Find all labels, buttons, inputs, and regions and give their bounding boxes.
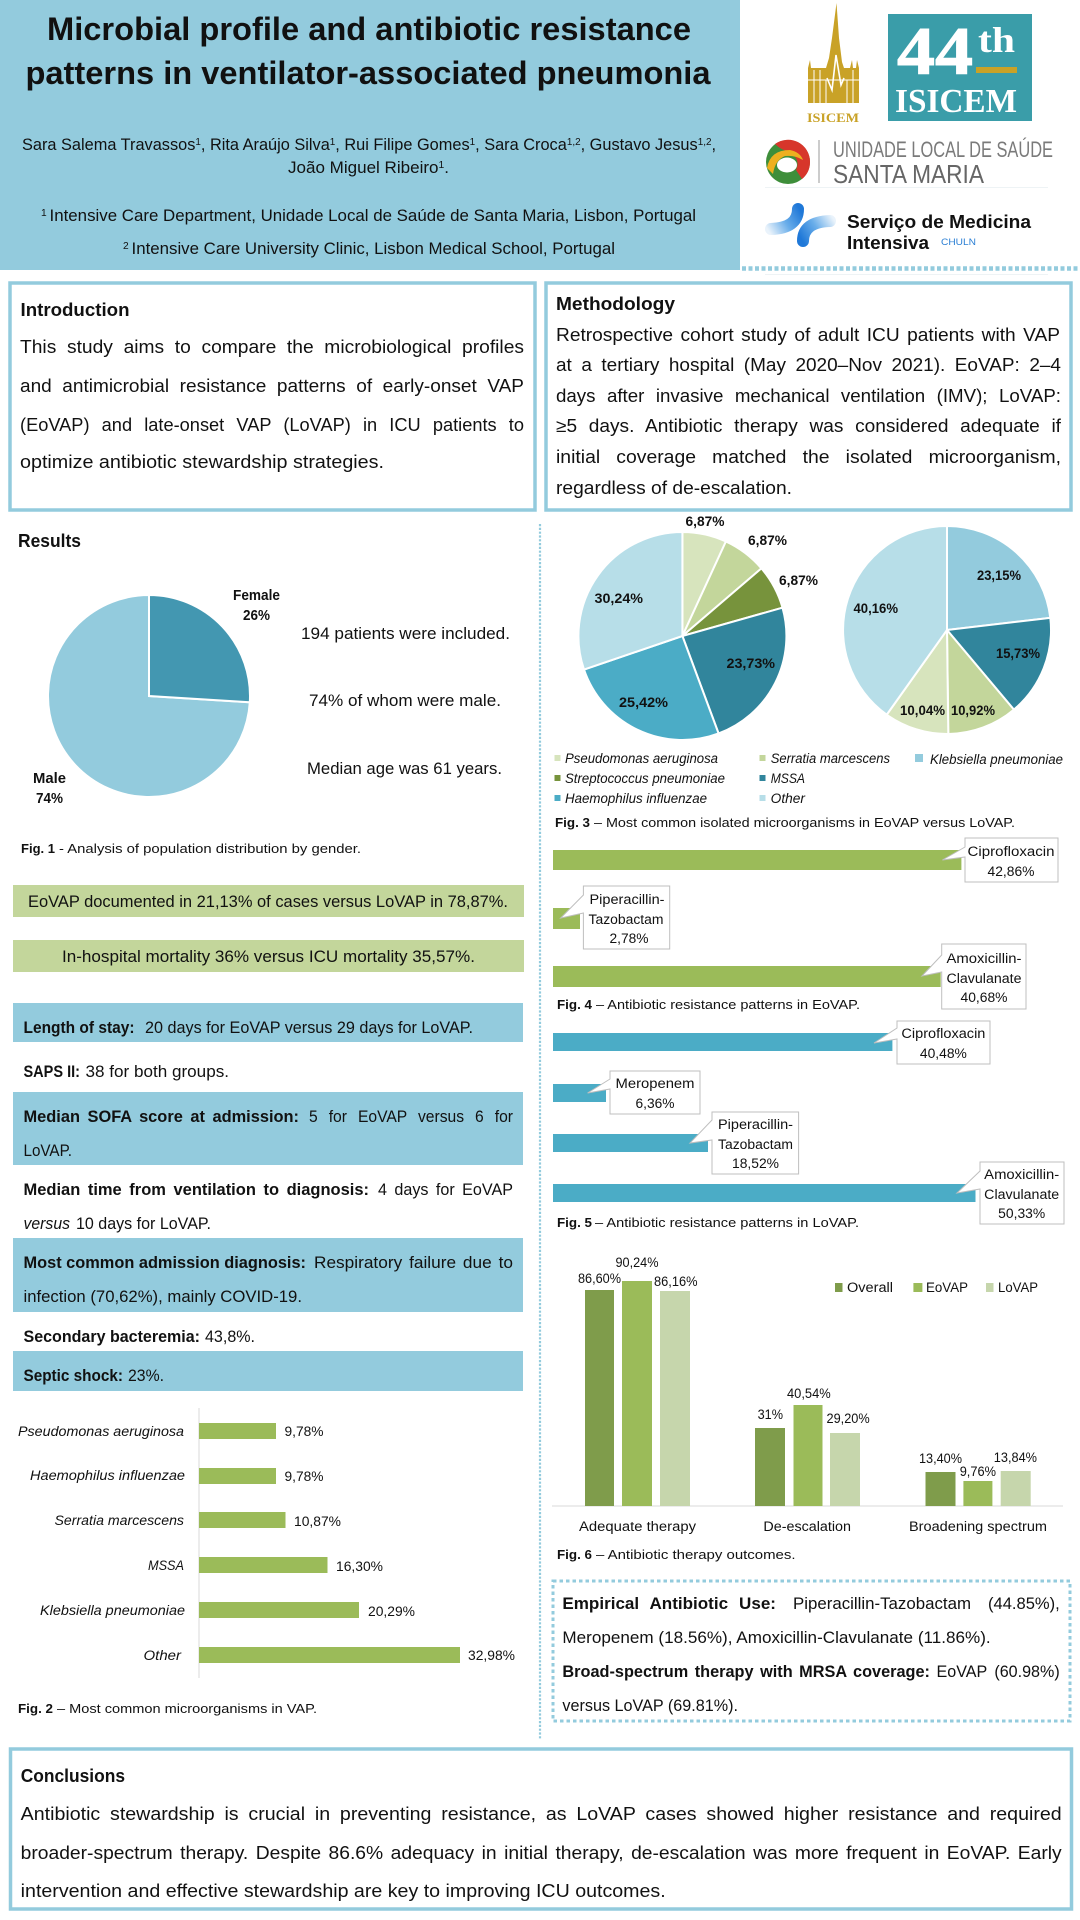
logo: ISICEM tower: [807, 3, 859, 125]
text: introduction body: optimize antibiotic stewardship strategies.: [20, 452, 384, 472]
logo: 44th ISICEM: ISICEM: [895, 83, 1017, 120]
result: SAPS II: [24, 1063, 229, 1081]
affiliations: Intensive Care Department, Unidade Local de Saúde de Santa Maria, Lisbon, Portugal: [50, 207, 696, 225]
callout: ciprofloxacin 40,48%: Ciprofloxacin: [901, 1026, 985, 1041]
caption: figure 1: Fig. 1: [21, 841, 55, 856]
text: methodology body: days after invasive mechanical ventilation (IMV); LoVAP:: [556, 386, 1061, 406]
callout: amoxicillin-clavulanate 40,68%: Clavulanate: [946, 971, 1022, 986]
bar chart: microorganisms in VAP: 20,29%: [368, 1604, 415, 1619]
result: SAPS II: SAPS II:: [24, 1063, 80, 1081]
text: conclusions body: broader-spectrum therapy. Despite 86.6% adequacy in initial therapy, de-escalation was more frequent in EoVAP. Early: [21, 1843, 1062, 1863]
panel: empirical antibiotic use: (44.85%),: [988, 1595, 1060, 1613]
title: patterns in ventilator-associated pneumonia: [26, 55, 711, 91]
pie chart: gender distribution: [33, 588, 280, 807]
callout: EoVAP vs LoVAP share: EoVAP documented in 21,13% of cases versus LoVAP in 78,87%.: [28, 892, 508, 911]
pie chart: EoVAP microorganisms: 30,24%: [594, 591, 643, 606]
legend: microorganisms: Other: [771, 791, 806, 806]
bar chart: resistance in LoVAP: [553, 1021, 1064, 1224]
text: conclusions body: [21, 1804, 1062, 1901]
affiliations: Intensive Care University Clinic, Lisbon Medical School, Portugal: [132, 240, 615, 258]
logo: Unidade Local de Saude Santa Maria: [765, 137, 1053, 189]
affiliations: 1: [41, 208, 50, 219]
caption: figure 2: – Most common microorganisms in VAP.: [57, 1701, 317, 1716]
authors: 1,2: [698, 137, 712, 148]
text: introduction body: (EoVAP) and late-onset VAP (LoVAP) in ICU patients to: [20, 415, 524, 435]
pie chart: LoVAP microorganisms: 23,15%: [977, 568, 1021, 583]
result: secondary bacteremia: 43,8%.: [205, 1328, 255, 1346]
result: admission diagnosis: Respiratory failure due to: [314, 1254, 513, 1272]
caption: figure 2: Fig. 2: [18, 1701, 53, 1716]
panel: empirical antibiotic use: Empirical Antibiotic Use:: [562, 1595, 776, 1613]
text: methodology body: regardless of de-escalation.: [556, 478, 792, 498]
callout: ciprofloxacin 42,86%: Ciprofloxacin: [968, 844, 1054, 859]
result: length of stay: Length of stay:: [24, 1019, 134, 1037]
bars: adequate therapy: 86,16%: [654, 1274, 698, 1289]
bar chart: microorganisms in VAP: Klebsiella pneumoniae: [40, 1603, 185, 1618]
authors: , Rita Araújo Silva: [201, 136, 331, 154]
heading: introduction: Introduction: [20, 300, 130, 320]
pie chart: EoVAP microorganisms: [578, 514, 818, 740]
bar chart: antibiotic therapy outcomes: [552, 1255, 1063, 1534]
pie chart: LoVAP microorganisms: 10,92%: [951, 703, 995, 718]
logo: Unidade Local de Saude Santa Maria: SANTA MARIA: [833, 159, 985, 189]
bar chart: microorganisms in VAP: Pseudomonas aeruginosa: [18, 1424, 185, 1439]
panel: conclusions: [10, 1749, 1072, 1909]
bars: adequate therapy: 86,60%: [578, 1271, 621, 1286]
logo: Servico de Medicina Intensiva: CHULN: [941, 237, 976, 248]
authors: , Gustavo Jesus: [581, 136, 698, 154]
result: median time to diagnosis: [24, 1181, 513, 1233]
caption: figure 3: Fig. 3: [555, 815, 590, 830]
bar chart: microorganisms in VAP: Other: [144, 1648, 182, 1663]
result: admission diagnosis: [13, 1238, 523, 1312]
legend: therapy outcomes: Overall: [847, 1280, 893, 1295]
caption: figure 5: – Antibiotic resistance patterns in LoVAP.: [595, 1215, 859, 1230]
affiliations: 2: [123, 241, 132, 252]
callout: mortality: In-hospital mortality 36% versus ICU mortality 35,57%.: [62, 947, 475, 966]
authors: Sara Salema Travassos: [22, 136, 197, 154]
panel: empirical antibiotic use: [553, 1581, 1070, 1721]
callout: piperacillin-tazobactam 18,52%: [690, 1112, 799, 1174]
legend: microorganisms: MSSA: [771, 771, 805, 786]
title: [26, 11, 711, 91]
result: median time to diagnosis: Median time from ventilation to diagnosis:: [24, 1181, 369, 1199]
caption: figure 4: Fig. 4: [557, 997, 593, 1012]
legend: therapy outcomes: EoVAP: [926, 1280, 968, 1295]
legend: microorganisms: Streptococcus pneumoniae: [565, 771, 725, 786]
bar chart: microorganisms in VAP: Serratia marcescens: [54, 1513, 184, 1528]
text: introduction body: and antimicrobial resistance patterns of early-onset VAP: [20, 376, 524, 396]
bars: de-escalation: 40,54%: [787, 1386, 831, 1401]
text: methodology body: [556, 325, 1062, 498]
result: median time to diagnosis: versus: [24, 1215, 70, 1233]
callout: piperacillin-tazobactam 18,52%: Tazobactam: [718, 1137, 793, 1152]
text: patient summary: Median age was 61 years.: [307, 760, 502, 778]
result: SAPS II: 38 for both groups.: [86, 1063, 229, 1081]
authors: 1,2: [567, 137, 581, 148]
legend: therapy outcomes: [835, 1280, 1038, 1295]
bars: adequate therapy: 90,24%: [616, 1255, 658, 1270]
callout: meropenem 6,36%: 6,36%: [636, 1096, 674, 1111]
text: patient summary: 194 patients were included.: [301, 625, 510, 643]
legend: microorganisms: Serratia marcescens: [771, 751, 890, 766]
bars: adequate therapy: [578, 1255, 698, 1534]
authors: 1: [330, 137, 336, 148]
pie chart: gender distribution: 74%: [36, 791, 63, 807]
logo: Servico de Medicina Intensiva: Serviço de Medicina: [847, 212, 1032, 232]
pie chart: LoVAP microorganisms: 15,73%: [996, 646, 1040, 661]
panel: empirical antibiotic use: Broad-spectrum therapy with MRSA coverage:: [562, 1663, 930, 1681]
text: methodology body: Retrospective cohort study of adult ICU patients with VAP: [556, 325, 1060, 345]
bars: adequate therapy: Adequate therapy: [579, 1519, 696, 1534]
heading: conclusions: Conclusions: [21, 1766, 125, 1786]
logo: 44th ISICEM: 44: [897, 13, 973, 89]
bars: de-escalation: De-escalation: [763, 1519, 851, 1534]
logo: ISICEM tower: ISICEM: [807, 111, 859, 125]
legend: microorganisms: Pseudomonas aeruginosa: [565, 751, 718, 766]
result: secondary bacteremia: Secondary bacteremia:: [24, 1328, 200, 1346]
bars: broadening spectrum: 13,40%: [919, 1451, 962, 1466]
text: introduction body: [20, 337, 524, 472]
legend: microorganisms: Klebsiella pneumoniae: [930, 752, 1063, 767]
result: median time to diagnosis: 4 days for EoVAP: [378, 1181, 513, 1199]
logo: 44th ISICEM: [888, 13, 1032, 121]
callout: ciprofloxacin 40,48%: 40,48%: [920, 1046, 967, 1061]
panel: empirical antibiotic use: Meropenem (18.56%), Amoxicillin-Clavulanate (11.86%).: [562, 1629, 991, 1647]
legend: microorganisms: [554, 751, 1063, 806]
callout: amoxicillin-clavulanate 40,68%: [922, 944, 1026, 1009]
pie chart: LoVAP microorganisms: [843, 526, 1051, 734]
result: length of stay: [13, 1003, 523, 1042]
callout: ciprofloxacin 40,48%: [874, 1021, 990, 1064]
callout: amoxicillin-clavulanate 40,68%: Amoxicillin-: [946, 951, 1022, 966]
legend: microorganisms: Haemophilus influenzae: [565, 791, 707, 806]
pie chart: EoVAP microorganisms: 6,87%: [779, 573, 818, 588]
logo: Servico de Medicina Intensiva: [771, 209, 1032, 253]
panel: introduction: [10, 283, 535, 510]
callout: piperacillin-tazobactam 2,78%: Piperacillin-: [590, 892, 664, 907]
bars: broadening spectrum: [909, 1450, 1047, 1534]
bars: broadening spectrum: 9,76%: [960, 1464, 996, 1479]
authors: 1: [439, 160, 445, 171]
title: Microbial profile and antibiotic resistance: [47, 11, 691, 47]
callout: amoxicillin-clavulanate 50,33%: 50,33%: [998, 1206, 1045, 1221]
result: length of stay: 20 days for EoVAP versus 29 days for LoVAP.: [145, 1019, 473, 1037]
callout: amoxicillin-clavulanate 40,68%: 40,68%: [960, 990, 1008, 1005]
bars: broadening spectrum: Broadening spectrum: [909, 1519, 1047, 1534]
callout: piperacillin-tazobactam 2,78%: Tazobactam: [588, 912, 664, 927]
callout: ciprofloxacin 42,86%: 42,86%: [988, 864, 1034, 879]
panel: empirical antibiotic use: Piperacillin-Tazobactam: [793, 1595, 971, 1613]
caption: figure 6: Fig. 6: [557, 1547, 592, 1562]
callout: piperacillin-tazobactam 2,78%: [561, 886, 670, 949]
pie chart: gender distribution: Male: [33, 771, 66, 787]
logo: 44th ISICEM: th: [978, 20, 1015, 60]
pie chart: LoVAP microorganisms: 10,04%: [900, 703, 945, 718]
result: median SOFA score: Median SOFA score at admission:: [24, 1108, 299, 1126]
heading: methodology: Methodology: [556, 294, 675, 314]
result: admission diagnosis: infection (70,62%), mainly COVID-19.: [24, 1288, 302, 1306]
callout: amoxicillin-clavulanate 50,33%: Clavulanate: [984, 1187, 1059, 1202]
pie chart: LoVAP microorganisms: 40,16%: [854, 601, 898, 616]
result: septic shock: [13, 1351, 523, 1391]
affiliations: [41, 207, 696, 258]
authors: 1: [470, 137, 476, 148]
bar chart: resistance in EoVAP: [553, 838, 1058, 1009]
caption: figure 1: - Analysis of population distribution by gender.: [59, 841, 361, 856]
bar chart: microorganisms in VAP: 32,98%: [468, 1648, 515, 1663]
result: septic shock: 23%.: [128, 1367, 164, 1385]
result: median time to diagnosis: 10 days for LoVAP.: [76, 1215, 211, 1233]
callout: piperacillin-tazobactam 2,78%: 2,78%: [610, 931, 648, 946]
callout: EoVAP vs LoVAP share: [13, 885, 524, 917]
caption: figure 6: – Antibiotic therapy outcomes.: [596, 1547, 796, 1562]
result: median SOFA score: LoVAP.: [24, 1142, 72, 1160]
result: median SOFA score: 5 for EoVAP versus 6 for: [309, 1108, 513, 1126]
caption: figure 3: – Most common isolated microorganisms in EoVAP versus LoVAP.: [594, 815, 1015, 830]
bars: de-escalation: 31%: [758, 1407, 783, 1422]
pie chart: EoVAP microorganisms: 6,87%: [686, 514, 724, 529]
bars: de-escalation: 29,20%: [826, 1411, 870, 1426]
panel: methodology: [546, 283, 1071, 510]
callout: piperacillin-tazobactam 18,52%: Piperacillin-: [718, 1117, 793, 1132]
bar chart: microorganisms in VAP: [18, 1408, 515, 1678]
bars: broadening spectrum: 13,84%: [994, 1450, 1037, 1465]
pie chart: EoVAP microorganisms: 25,42%: [619, 695, 668, 710]
text: introduction body: This study aims to compare the microbiological profiles: [20, 337, 524, 357]
bar chart: microorganisms in VAP: Haemophilus influenzae: [30, 1468, 185, 1483]
bars: de-escalation: [755, 1386, 870, 1534]
caption: figure 5: Fig. 5: [557, 1215, 592, 1230]
heading: results: Results: [18, 531, 81, 551]
bar chart: microorganisms in VAP: 9,78%: [284, 1469, 324, 1484]
callout: amoxicillin-clavulanate 50,33%: Amoxicillin-: [984, 1167, 1059, 1182]
text: conclusions body: Antibiotic stewardship is crucial in preventing resistance, as LoVAP cases showed higher resistance and required: [21, 1804, 1062, 1824]
authors: .: [444, 159, 449, 177]
authors: João Miguel Ribeiro: [288, 159, 434, 177]
bar chart: microorganisms in VAP: 9,78%: [284, 1424, 324, 1439]
text: conclusions body: intervention and effective stewardship are key to improving ICU outcomes.: [21, 1881, 666, 1901]
pie chart: gender distribution: Female: [233, 588, 280, 604]
callout: ciprofloxacin 42,86%: [942, 838, 1058, 882]
authors: , Rui Filipe Gomes: [335, 136, 470, 154]
result: admission diagnosis: Most common admission diagnosis:: [24, 1254, 306, 1272]
bar chart: microorganisms in VAP: 10,87%: [294, 1514, 341, 1529]
authors: , Sara Croca: [475, 136, 568, 154]
authors: ,: [711, 136, 716, 154]
text: methodology body: at a tertiary hospital (May 2020–Nov 2021). EoVAP: 2–4: [556, 355, 1061, 375]
callout: piperacillin-tazobactam 18,52%: 18,52%: [732, 1156, 779, 1171]
bar chart: microorganisms in VAP: 16,30%: [336, 1559, 383, 1574]
pie chart: gender distribution: 26%: [243, 608, 270, 624]
bar chart: microorganisms in VAP: MSSA: [148, 1558, 184, 1573]
callout: amoxicillin-clavulanate 50,33%: [957, 1162, 1064, 1224]
panel: empirical antibiotic use: EoVAP (60.98%): [936, 1663, 1060, 1681]
text: patient summary: 74% of whom were male.: [309, 692, 501, 710]
logo: Servico de Medicina Intensiva: Intensiva: [847, 233, 930, 253]
pie chart: EoVAP microorganisms: 23,73%: [726, 656, 775, 671]
text: patient summary: [301, 625, 510, 778]
callout: mortality: [13, 940, 524, 972]
legend: therapy outcomes: LoVAP: [998, 1280, 1038, 1295]
pie chart: EoVAP microorganisms: 6,87%: [748, 533, 787, 548]
callout: meropenem 6,36%: Meropenem: [616, 1076, 694, 1091]
panel: empirical antibiotic use: versus LoVAP (69.81%).: [562, 1697, 738, 1715]
result: median SOFA score: [13, 1092, 523, 1165]
text: methodology body: ≥5 days. Antibiotic therapy was considered adequate if: [556, 416, 1062, 436]
header panel: [0, 0, 740, 270]
result: septic shock: Septic shock:: [24, 1367, 123, 1385]
callout: meropenem 6,36%: [588, 1071, 700, 1114]
text: methodology body: initial coverage matched the isolated microorganism,: [556, 447, 1061, 467]
authors: 1: [195, 137, 201, 148]
caption: figure 4: – Antibiotic resistance patterns in EoVAP.: [596, 997, 860, 1012]
authors: [22, 136, 716, 177]
